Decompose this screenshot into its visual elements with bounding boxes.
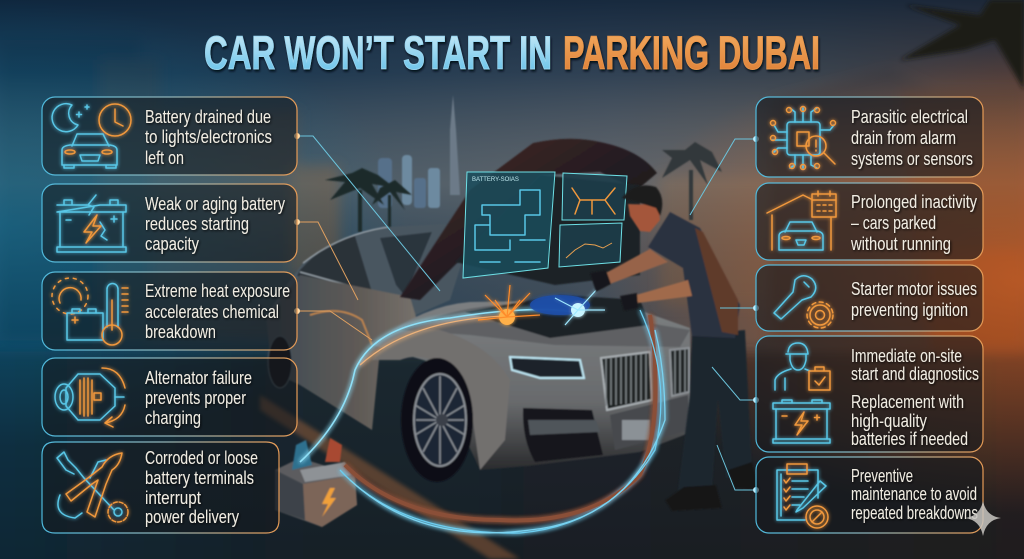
text: prolonged inactivity — [850, 191, 978, 254]
spark: orange — [478, 285, 540, 325]
text: extreme heat: accelerates chemical — [145, 301, 279, 322]
text: alternator: Alternator failure — [145, 367, 252, 388]
engine bay — [465, 295, 650, 338]
text: on-site service: Immediate on-site — [851, 345, 962, 366]
panel: extreme heat — [42, 272, 297, 350]
holographic panel: wiring diagram: BATTERY-SOIAS — [472, 177, 519, 183]
panel: weak battery — [42, 184, 297, 262]
text: extreme heat: breakdown — [145, 321, 216, 342]
text: corroded terminals: battery terminals — [145, 467, 254, 488]
title: blue part: CAR WON’T START IN — [204, 26, 552, 79]
text: starter motor: preventing ignition — [851, 299, 968, 320]
text: corroded terminals: Corroded or loose — [145, 447, 258, 468]
text: replacement — [851, 391, 968, 449]
headlight — [510, 357, 584, 378]
icon: new battery — [773, 400, 830, 443]
icon: alternator — [55, 368, 125, 427]
text: prolonged inactivity: Prolonged inactivity — [851, 191, 978, 212]
text: parasitic drain: drain from alarm — [851, 127, 956, 148]
mechanic boots — [665, 462, 760, 511]
text: battery drained: left on — [145, 147, 184, 168]
text: parasitic drain: Parasitic electrical — [851, 106, 968, 127]
jump starter battery pack — [275, 438, 357, 527]
text: on-site service — [851, 345, 979, 384]
mechanic head — [628, 204, 660, 232]
text: prolonged inactivity: without running — [850, 233, 951, 254]
text: corroded terminals: interrupt — [145, 487, 201, 508]
text: parasitic drain: systems or sensors — [851, 148, 973, 169]
panel: parasitic drain — [756, 97, 983, 177]
text: battery drained: Battery drained due — [145, 106, 271, 127]
car windows — [297, 236, 372, 292]
text: extreme heat — [145, 280, 290, 342]
text: preventive maintenance — [851, 465, 978, 523]
lower intake — [523, 408, 603, 462]
text: on-site service: start and diagnostics — [851, 363, 979, 384]
text: preventive maintenance: maintenance to avoid — [851, 483, 977, 504]
mechanic torso — [648, 212, 740, 338]
jumper cables and energy arcs — [300, 310, 665, 533]
panel: preventive maintenance — [756, 457, 983, 533]
text: replacement: Replacement with — [851, 391, 964, 412]
holographic panel: wiring diagram — [463, 172, 555, 278]
panel: on-site service and replacement — [756, 336, 983, 452]
text: weak battery: Weak or aging battery — [145, 193, 286, 214]
icon: sun, battery, thermometer — [52, 278, 128, 345]
mechanic — [590, 185, 760, 511]
holographic panel: circuit — [562, 173, 627, 220]
palm trees — [325, 142, 722, 232]
text: weak battery: capacity — [145, 233, 200, 254]
icon: cracked battery — [57, 195, 126, 252]
mechanic gloves — [590, 270, 638, 311]
text: corroded terminals — [145, 447, 258, 527]
text: alternator: prevents proper — [145, 387, 246, 408]
panel: prolonged inactivity — [756, 183, 983, 260]
connector lines — [294, 133, 759, 493]
icon: sparkle watermark — [965, 501, 1001, 536]
text: starter motor: Starter motor issues — [851, 278, 977, 299]
text: parasitic drain — [851, 106, 973, 169]
icon: moon, clock and car — [52, 104, 131, 168]
text: alternator: charging — [145, 407, 201, 428]
text: battery drained — [145, 106, 272, 168]
text: weak battery — [145, 193, 286, 254]
text: replacement: high-quality — [851, 410, 928, 431]
text: prolonged inactivity: – cars parked — [851, 212, 936, 233]
text: replacement: batteries if needed — [851, 428, 968, 449]
icon: technician with clipboard — [775, 343, 830, 390]
spark: blue — [530, 288, 605, 325]
top-right palm fronds — [900, 0, 1024, 90]
holographic panel: line graph — [559, 223, 622, 267]
icon: checklist with pen and no-sign — [777, 464, 828, 528]
icon: pliers and wrench — [57, 452, 128, 522]
text: battery drained: to lights/electronics — [145, 126, 272, 147]
car side — [266, 275, 420, 430]
car cabin — [270, 224, 470, 372]
mechanic arms — [604, 249, 668, 284]
text: corroded terminals: power delivery — [145, 506, 240, 527]
title — [204, 26, 820, 79]
under-hood shadow behind panels — [455, 175, 640, 285]
icon: key and gear — [774, 276, 833, 328]
text: preventive maintenance: repeated breakdowns — [851, 502, 978, 523]
panel: battery drained — [42, 97, 297, 175]
text: starter motor — [851, 278, 977, 320]
text: weak battery: reduces starting — [145, 213, 249, 234]
text: alternator — [145, 367, 252, 428]
text: preventive maintenance: Preventive — [851, 465, 913, 486]
open hood — [400, 139, 657, 300]
grille — [601, 348, 689, 410]
car — [266, 224, 692, 482]
icon: garage, calendar, car — [767, 191, 836, 250]
panel: starter motor — [756, 265, 983, 331]
title: orange part: PARKING DUBAI — [563, 26, 820, 79]
panel: corroded terminals — [42, 442, 279, 533]
skyline with Burj tower — [378, 95, 460, 208]
car hood and front — [372, 300, 692, 470]
panel: alternator — [42, 358, 297, 436]
rear wheel — [268, 336, 292, 388]
icon: chip with magnifier — [770, 106, 836, 170]
text: extreme heat: Extreme heat exposure — [145, 280, 290, 301]
front wheel — [401, 358, 473, 482]
mechanic legs — [678, 330, 752, 490]
